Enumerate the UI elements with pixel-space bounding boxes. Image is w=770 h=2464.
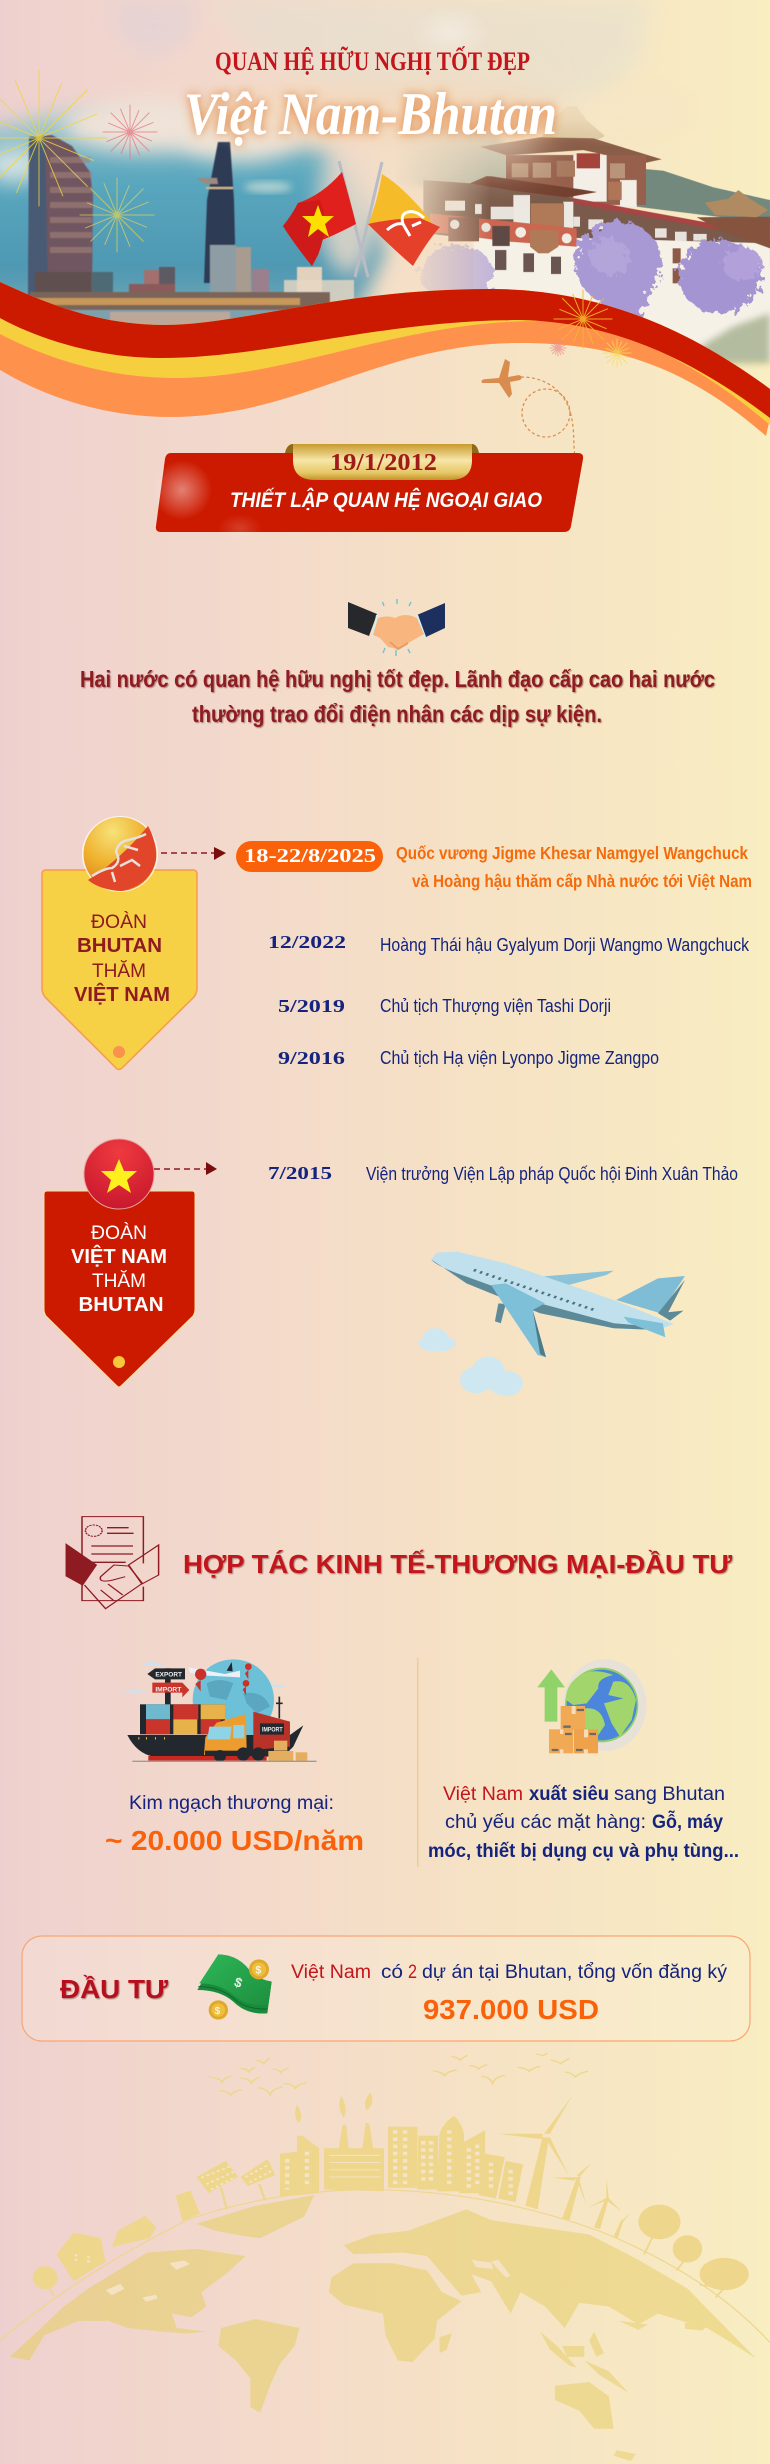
- panel: exports: [428, 1659, 739, 1862]
- shield label: [71, 1223, 167, 1316]
- banner label: THIẾT LẬP QUAN HỆ NGOẠI GIAO: [230, 488, 542, 512]
- icon: Bhutan flag ball: [82, 816, 158, 892]
- arrow: [161, 847, 226, 860]
- icon: money: $: [232, 1974, 245, 1991]
- industry skyline: [33, 2092, 749, 2297]
- icon: shipping and logistics: IMPORT: [155, 1686, 181, 1693]
- icon: globe with parcels: [537, 1659, 647, 1753]
- banner body: [156, 453, 583, 532]
- export text: sang Bhutan: [614, 1784, 725, 1805]
- visit 5/2019: [278, 996, 611, 1016]
- shield label: VIỆT NAM: [71, 1244, 167, 1268]
- sparkles: [152, 460, 262, 542]
- arrow: [154, 1162, 217, 1175]
- visit 9/2016: [278, 1048, 659, 1068]
- panel: investment: [22, 1936, 750, 2041]
- shield dot: [113, 1356, 125, 1368]
- subtitle: QUAN HỆ HỮU NGHỊ TỐT ĐẸP: [215, 47, 530, 76]
- icon: money: $: [255, 1965, 261, 1977]
- continents: [10, 2195, 756, 2461]
- shield label: THĂM: [92, 961, 146, 982]
- heading text: HỢP TÁC KINH TẾ-THƯƠNG MẠI-ĐẦU TƯ: [183, 1549, 732, 1579]
- ribbon fireworks: [550, 290, 631, 367]
- label: Kim ngạch thương mại:: [129, 1793, 334, 1814]
- fireworks: [0, 70, 157, 252]
- shield dot: [113, 1046, 125, 1058]
- city sky: [0, 99, 385, 335]
- hero illustration: [0, 0, 770, 363]
- gold ribbon tab: [285, 444, 479, 480]
- icon: contract handshake: [66, 1517, 159, 1609]
- globe outline: [0, 2190, 770, 2342]
- decorative globe with green city: [0, 2053, 770, 2461]
- temple: [380, 107, 770, 363]
- upper haze over photos: [195, 4, 690, 170]
- panel: Vietnam delegation: [44, 1139, 738, 1387]
- divider: [417, 1658, 418, 1867]
- highlight visit: [236, 841, 752, 891]
- shield label: BHUTAN: [77, 935, 162, 957]
- value: 937.000 USD: [423, 1994, 599, 2025]
- visit 5/2019: Chủ tịch Thượng viện Tashi Dorji: [380, 996, 611, 1016]
- icon: airplane with clouds: [418, 1252, 685, 1396]
- shield label: BHUTAN: [78, 1294, 164, 1316]
- export text: Gỗ, máy: [652, 1811, 723, 1833]
- faded world map: [110, 0, 650, 130]
- panel: Bhutan delegation: [42, 816, 752, 1070]
- visit 12/2022: 12/2022: [268, 932, 346, 952]
- visit 5/2019: 5/2019: [278, 996, 345, 1016]
- shield: [44, 1191, 195, 1387]
- icon: shipping and logistics: EXPORT: [155, 1671, 182, 1678]
- skyline: [28, 135, 354, 328]
- icon: Vietnam flag ball: [84, 1139, 154, 1209]
- export text: [428, 1784, 739, 1862]
- shield label: VIỆT NAM: [74, 982, 170, 1006]
- icon: money: [197, 1954, 272, 2020]
- visit 9/2016: 9/2016: [278, 1048, 345, 1068]
- investment text: Việt Nam: [291, 1962, 371, 1983]
- visit 12/2022: [268, 932, 750, 955]
- poles: [339, 161, 382, 277]
- box: [22, 1936, 750, 2041]
- value: ~ 20.000 USD/năm: [105, 1825, 364, 1856]
- shield label: ĐOÀN: [91, 912, 147, 933]
- land gaps: [106, 2195, 511, 2302]
- export text: xuất siêu: [529, 1784, 609, 1805]
- icon: handshake: [348, 599, 445, 656]
- shield label: ĐOÀN: [91, 1223, 147, 1244]
- section heading: economy: [66, 1517, 732, 1609]
- icon: money: $: [215, 2006, 221, 2017]
- shield: [42, 870, 197, 1070]
- icon: shipping and logistics: IMPORT: [262, 1727, 283, 1733]
- investment text: dự án tại Bhutan, tổng vốn đăng ký: [422, 1962, 728, 1983]
- intro text: thường trao đổi điện nhân các dịp sự kiện.: [192, 701, 602, 727]
- date: 19/1/2012: [330, 450, 437, 476]
- flag: Bhutan: [368, 174, 440, 266]
- flag: Vietnam: [283, 172, 356, 266]
- ribbon: [0, 282, 770, 436]
- icon: shipping and logistics: [123, 1659, 317, 1762]
- main title: Việt Nam-Bhutan: [184, 81, 557, 147]
- investment text: có: [381, 1962, 403, 1983]
- shield label: THĂM: [92, 1271, 146, 1292]
- birds: [209, 2053, 588, 2095]
- visit 9/2016: Chủ tịch Hạ viện Lyonpo Jigme Zangpo: [380, 1048, 659, 1068]
- crossed flags: [283, 161, 440, 277]
- label: ĐẦU TƯ: [60, 1974, 168, 2004]
- investment text: [291, 1962, 728, 1983]
- shield label: [74, 912, 170, 1006]
- export text: chủ yếu các mặt hàng:: [445, 1812, 646, 1833]
- export text: Việt Nam: [443, 1784, 523, 1805]
- panel: trade value: [105, 1659, 364, 1856]
- date banner: [152, 444, 583, 542]
- building windows: [76, 2130, 511, 2263]
- export text: móc, thiết bị dụng cụ và phụ tùng...: [428, 1841, 739, 1862]
- highlight visit: 18-22/8/2025: [244, 845, 376, 867]
- intro text: [80, 666, 715, 727]
- small plane with dotted path: [482, 359, 575, 456]
- visit 7/2015: 7/2015: [268, 1163, 332, 1183]
- investment text: 2: [408, 1962, 417, 1983]
- title: [184, 47, 557, 147]
